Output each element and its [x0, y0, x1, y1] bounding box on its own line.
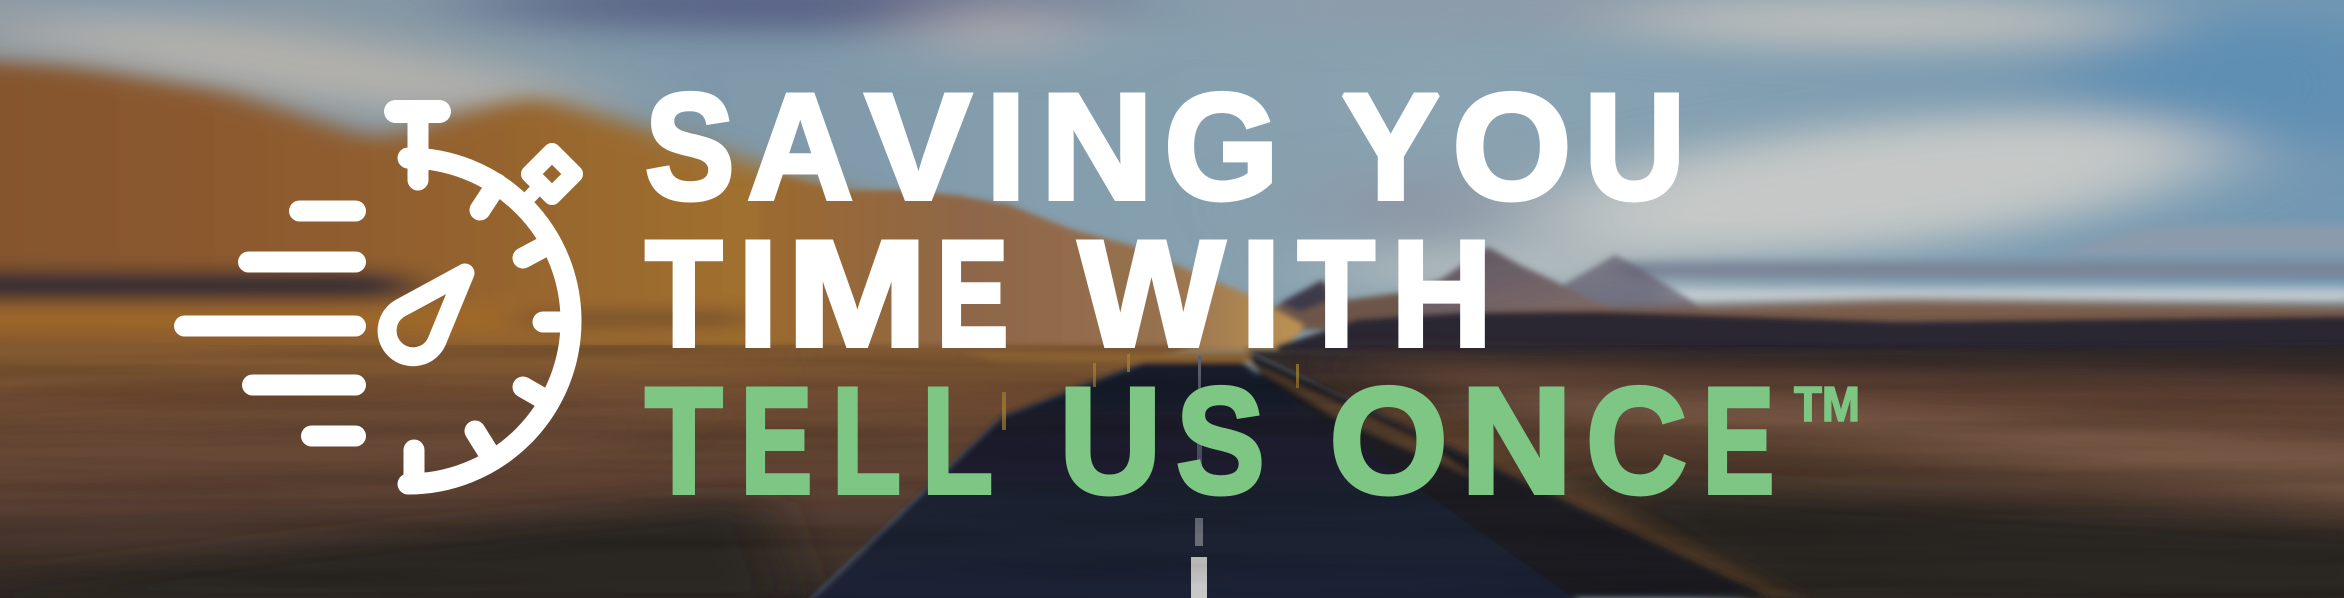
stopwatch dial and ticks [408, 158, 571, 484]
dark hill and right horizon [1500, 300, 2344, 335]
title line 3: C [1586, 356, 1687, 524]
title line 2: I [738, 210, 777, 378]
road [800, 350, 1771, 598]
title line 1: Y [1342, 62, 1440, 230]
title line 3: S [1176, 356, 1265, 524]
title line 2: I [1241, 210, 1280, 378]
title line 1: U [1584, 62, 1685, 230]
title line 1: N [1041, 62, 1153, 230]
fence posts [1002, 354, 1299, 430]
stopwatch crown [396, 111, 440, 180]
right field [1245, 345, 2344, 598]
title line 1: O [1452, 62, 1571, 230]
title line 2: H [1391, 210, 1492, 378]
road centre line [1191, 356, 1207, 598]
title line 2: E [937, 210, 1008, 378]
title line 3: E [1703, 356, 1774, 524]
trademark: TM [1794, 378, 1860, 432]
central mountain [760, 172, 1305, 352]
title line 2: M [787, 210, 927, 378]
title line 3: T [645, 356, 722, 524]
title line 1: V [866, 62, 971, 230]
title line 3: U [1059, 356, 1161, 524]
title line 3: L [922, 356, 991, 524]
title line 1: G [1164, 62, 1279, 230]
horizon clouds [1620, 225, 2344, 304]
icon: stopwatch with speed lines [184, 111, 574, 484]
title line 3: E [741, 356, 812, 524]
motion streaks [0, 345, 2344, 598]
left field [0, 345, 1195, 598]
stopwatch needle [387, 273, 465, 357]
title line 3: O [1330, 356, 1448, 524]
title line 1: I [986, 62, 1025, 230]
title line 2: T [645, 210, 722, 378]
title line 1: A [748, 62, 853, 230]
title line 3: N [1461, 356, 1572, 524]
left hill [0, 57, 940, 370]
stopwatch side button [522, 152, 574, 205]
title [645, 62, 1774, 524]
speed lines [184, 211, 356, 436]
title line 2: T [1298, 210, 1375, 378]
title line 1: S [645, 62, 734, 230]
distant dark mountains [1260, 247, 1720, 330]
title line 3: L [832, 356, 901, 524]
title line 2: W [1079, 210, 1224, 378]
